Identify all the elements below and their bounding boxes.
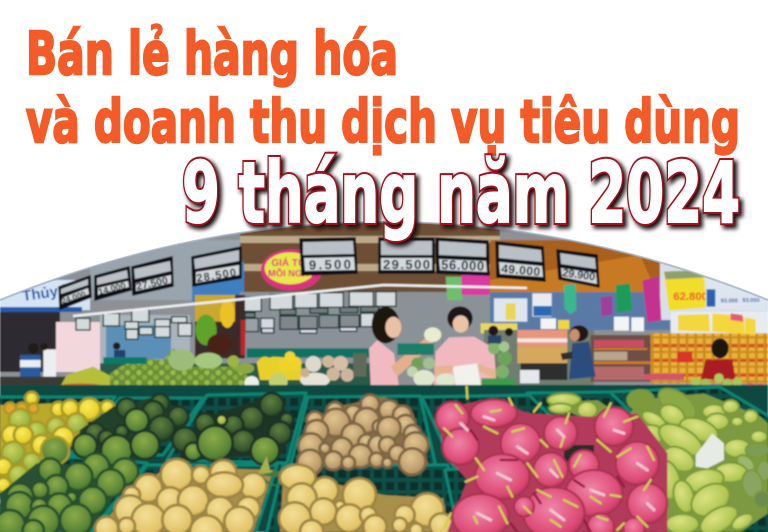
price sign 29.500: 29.500 — [383, 257, 430, 272]
price sign 24.000: 24.000 — [60, 289, 87, 306]
price sign 49.000: 49.000 — [501, 262, 541, 279]
supermarket photo banner — [0, 221, 768, 532]
ceiling light beam — [73, 285, 527, 316]
promo oval: giá tốt mỗi ngày — [261, 249, 322, 291]
sapodilla crate — [297, 395, 428, 475]
yellow price sign 62.800 — [664, 270, 708, 311]
dragon fruit — [436, 399, 667, 532]
yellow fruit crate — [95, 459, 273, 532]
promo oval: giá tốt mỗi ngày: MỖI NGÀY — [268, 268, 316, 279]
price sign 29.500 — [379, 238, 434, 273]
golden fruit crate — [279, 465, 453, 532]
leaves on yellow fruit — [258, 456, 281, 490]
price sign 49.000 — [496, 242, 545, 281]
small shelf price tags — [76, 292, 396, 339]
price sign 28.500: 28.500 — [196, 267, 237, 285]
title line 1: Bán lẻ hàng hóa — [26, 19, 398, 88]
price sign 29.900 — [557, 250, 599, 287]
white price boards: 93.000 — [721, 299, 738, 305]
woman in floral shirt — [561, 325, 596, 379]
right side store banners and shelves — [446, 275, 768, 387]
crate base area — [0, 385, 768, 532]
background shoppers — [488, 326, 513, 343]
price sign 29.900: 29.900 — [562, 267, 596, 284]
crates — [0, 387, 768, 532]
wall label: Thủy hải sản: Thủy h — [21, 281, 72, 305]
price sign 14.000: 14.000 — [97, 280, 127, 297]
price sign 56.000: 56.000 — [441, 257, 484, 273]
white price boards: 93.000 — [742, 298, 760, 304]
limes crate — [0, 453, 140, 532]
store background — [0, 222, 768, 386]
middle produce counter — [0, 348, 371, 386]
price sign 56.000 — [436, 238, 489, 275]
price sign 28.500 — [192, 247, 241, 286]
woman holding a cabbage — [369, 307, 441, 387]
man in red shirt — [701, 338, 736, 379]
avocados right crate — [172, 393, 293, 465]
vegetables by the women — [397, 341, 515, 387]
hanging price signs — [59, 238, 599, 309]
photo arch rim — [0, 222, 768, 300]
avocados left crate — [73, 394, 188, 466]
price sign 27.500 — [132, 257, 173, 295]
plastic bag — [696, 433, 724, 468]
woman holding a bag — [434, 306, 497, 385]
promo oval: giá tốt mỗi ngày: GIÁ TỐT — [271, 255, 312, 269]
price sign 27.500: 27.500 — [135, 275, 169, 293]
fruit poster — [195, 295, 245, 358]
lemons — [0, 392, 114, 493]
price sign 9.500 — [300, 238, 357, 275]
white price boards — [704, 288, 760, 308]
counter rail and apples — [482, 372, 764, 386]
dragon fruit scales — [444, 387, 654, 532]
yellow price sign 62.800: 62.800 — [673, 291, 708, 303]
price sign 14.000 — [95, 267, 131, 300]
shoppers on the left — [18, 342, 126, 378]
price sign 24.000 — [59, 276, 91, 309]
green mangoes — [547, 382, 768, 532]
price sign 9.500: 9.500 — [309, 257, 351, 272]
